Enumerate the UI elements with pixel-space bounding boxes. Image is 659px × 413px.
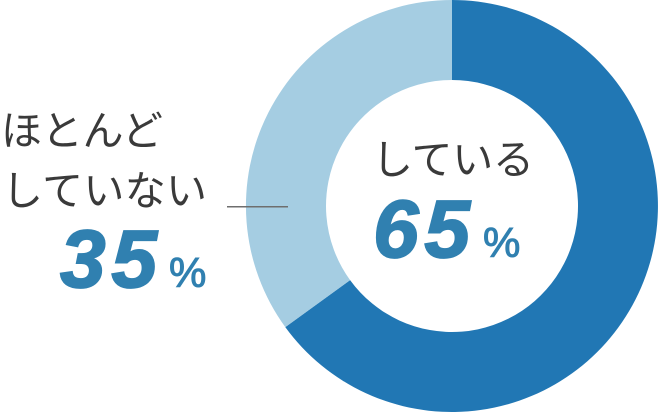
leader line [227,206,288,208]
label: ほとんどしていない [1,108,207,214]
value: 35%: % [169,249,206,296]
segment: ほとんどしていない 35% [246,0,452,327]
donut chart [246,0,658,412]
value: 65%: 65 [373,184,471,275]
value: 65%: % [483,219,520,266]
label: ほとんどしていない: していない [2,168,207,214]
value: 35%: 35 [60,214,158,305]
value: 35% [60,214,206,305]
label: ほとんどしていない: ほとんど [1,108,163,154]
segment: している 65% [285,0,658,412]
label: している: している [372,137,534,183]
value: 65% [373,184,520,275]
